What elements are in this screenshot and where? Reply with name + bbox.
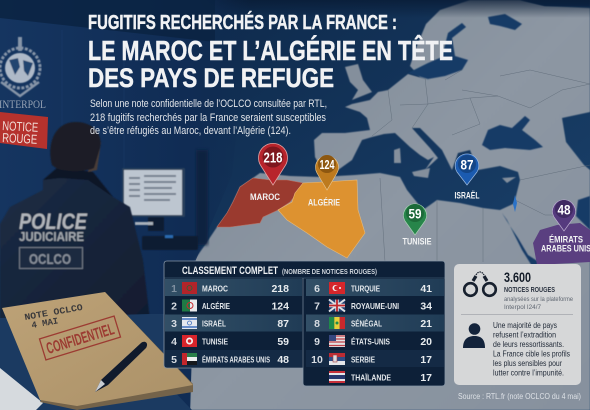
row 8 Sénégal: 8 xyxy=(314,318,320,330)
jacket badge OCLCO: OCLCO xyxy=(29,251,71,268)
Interpol emblem xyxy=(0,37,40,96)
pin Maroc 218: 218 xyxy=(264,150,282,166)
row 6 Turquie: 41 xyxy=(420,283,432,295)
row 9 États-Unis: 20 xyxy=(420,336,432,348)
table heading: CLASSEMENT COMPLET xyxy=(182,265,278,277)
stat details: analysées sur la plateforme xyxy=(504,296,573,303)
notice rouge sign: ROUGE xyxy=(2,130,38,147)
row 3 Israël: 87 xyxy=(277,318,289,330)
stat details: Interpol I24/7 xyxy=(504,304,541,311)
row 5 Émirats arabes unis xyxy=(171,353,289,366)
row 8 Sénégal xyxy=(314,317,432,330)
label Émirats arabes unis: ÉMIRATS xyxy=(549,234,583,246)
loose papers xyxy=(0,368,43,410)
computer monitor xyxy=(122,168,198,250)
title: LE MAROC ET L’ALGÉRIE EN TÊTE xyxy=(88,35,453,66)
title xyxy=(88,11,453,93)
stat 3.600: 3.600 xyxy=(504,269,531,285)
row 4 Tunisie xyxy=(171,335,289,348)
pen xyxy=(95,342,147,392)
title: FUGITIFS RECHERCHÉS PAR LA FRANCE : xyxy=(88,11,397,34)
intro paragraph: de s’être réfugiés au Maroc, devant l’Algérie (124). xyxy=(90,125,291,137)
row 10 Serbie: 17 xyxy=(420,354,432,366)
notice rouge sign: NOTICE xyxy=(2,118,39,135)
pin Maroc 218 xyxy=(258,143,288,185)
row 3 Israël: ISRAËL xyxy=(202,318,226,328)
stamp confidentiel: CONFIDENTIEL xyxy=(44,321,117,358)
table heading: (NOMBRE DE NOTICES ROUGES) xyxy=(282,267,377,276)
stat details xyxy=(504,296,573,311)
row 10 Serbie: 10 xyxy=(311,354,323,366)
pin Tunisie 59 xyxy=(404,204,426,235)
row 9 États-Unis: 9 xyxy=(314,336,320,348)
row 1 Maroc: 218 xyxy=(271,283,289,295)
dark fade at top of map xyxy=(200,0,590,18)
row 8 Sénégal: SÉNÉGAL xyxy=(351,318,382,328)
row 9 États-Unis xyxy=(314,335,432,348)
row 2 Algérie xyxy=(171,300,289,312)
label Algérie: ALGÉRIE xyxy=(308,198,340,208)
row 5 Émirats arabes unis: ÉMIRATS ARABES UNIS xyxy=(202,354,270,364)
row 2 Algérie: ALGÉRIE xyxy=(202,301,230,311)
pin Israël 87 xyxy=(455,154,479,185)
icon: person xyxy=(463,323,485,348)
intro paragraph xyxy=(90,98,327,137)
card body text: les plus sensibles pour xyxy=(493,359,562,368)
icon: handcuffs xyxy=(464,272,496,296)
desk xyxy=(0,314,192,410)
police officer seen from behind xyxy=(0,122,150,320)
row 8 Sénégal: 21 xyxy=(420,318,432,330)
row 3 Israël: 3 xyxy=(171,318,177,330)
row 4 Tunisie: TUNISIE xyxy=(202,336,228,346)
row 4 Tunisie: 59 xyxy=(277,336,289,348)
row 1 Maroc xyxy=(171,282,289,295)
row 6 Turquie xyxy=(314,282,432,295)
table heading xyxy=(182,265,377,277)
row 5 Émirats arabes unis: 48 xyxy=(277,354,289,366)
card body text: de leurs ressortissants. xyxy=(493,340,564,349)
Israel territory marker xyxy=(513,195,517,212)
row 3 Israël xyxy=(171,317,289,330)
row 10 Serbie: SERBIE xyxy=(351,354,375,364)
row 2 Algérie: 2 xyxy=(171,300,177,312)
pin Algérie 124 xyxy=(316,155,338,190)
Émirats shape xyxy=(533,223,590,265)
label Tunisie: TUNISIE xyxy=(402,236,432,248)
folder note text: NOTE OCLCO xyxy=(24,303,84,323)
intro paragraph: 218 fugitifs recherchés par la France seraient susceptibles xyxy=(90,112,326,124)
pin Algérie 124: 124 xyxy=(320,157,335,172)
label Maroc: MAROC xyxy=(250,192,280,203)
row 10 Thaïlande: 17 xyxy=(420,372,432,384)
row 10 Thaïlande xyxy=(329,371,432,384)
intro paragraph: Selon une note confidentielle de l’OCLCO consultée par RTL, xyxy=(90,98,327,110)
left scene: wall background xyxy=(0,0,250,410)
info card xyxy=(454,264,581,385)
row 10 Serbie xyxy=(311,353,432,366)
jacket text JUDICIAIRE: JUDICIAIRE xyxy=(19,230,84,244)
label Israël: ISRAËL xyxy=(454,190,480,202)
pin Tunisie 59: 59 xyxy=(408,206,422,222)
card body text: Une majorité de pays xyxy=(493,321,557,330)
card body text: lutter contre l’impunité. xyxy=(493,368,564,378)
ranking table xyxy=(164,261,445,386)
jacket badge OCLCO xyxy=(20,248,82,268)
row 1 Maroc: MAROC xyxy=(202,284,228,294)
row 5 Émirats arabes unis: 5 xyxy=(171,354,177,366)
Algérie shape xyxy=(278,180,365,258)
row 7 Royaume-Uni xyxy=(314,300,432,312)
row 9 États-Unis: ÉTATS-UNIS xyxy=(351,336,390,346)
Maroc shape xyxy=(217,178,303,227)
title: DES PAYS DE REFUGE xyxy=(88,63,334,93)
row 10 Thaïlande: THAÏLANDE xyxy=(351,372,391,382)
folder date text: 4 MAI xyxy=(31,316,59,331)
row 1 Maroc: 1 xyxy=(171,283,177,295)
confidential folder xyxy=(2,292,193,410)
card body text: La France cible les profils xyxy=(493,350,570,358)
card body text: refusent l’extradition xyxy=(493,330,556,340)
row 7 Royaume-Uni: ROYAUME-UNI xyxy=(351,301,399,311)
row 6 Turquie: TURQUIE xyxy=(351,284,380,294)
row 2 Algérie: 124 xyxy=(271,300,289,312)
label Émirats arabes unis xyxy=(541,234,590,254)
card body text xyxy=(493,321,570,378)
stamp confidentiel xyxy=(39,316,121,360)
notice rouge sign xyxy=(0,112,48,149)
pin Israël 87: 87 xyxy=(460,156,474,172)
Interpol label: INTERPOL xyxy=(0,97,46,111)
row 4 Tunisie: 4 xyxy=(171,336,177,348)
pin Émirats 48: 48 xyxy=(558,202,571,218)
jacket text POLICE: POLICE xyxy=(19,209,88,234)
stat label: NOTICES ROUGES xyxy=(504,285,555,294)
row 6 Turquie: 6 xyxy=(314,283,320,295)
row 7 Royaume-Uni: 7 xyxy=(314,300,320,312)
row 7 Royaume-Uni: 34 xyxy=(420,300,432,312)
pin Émirats 48 xyxy=(553,200,575,231)
